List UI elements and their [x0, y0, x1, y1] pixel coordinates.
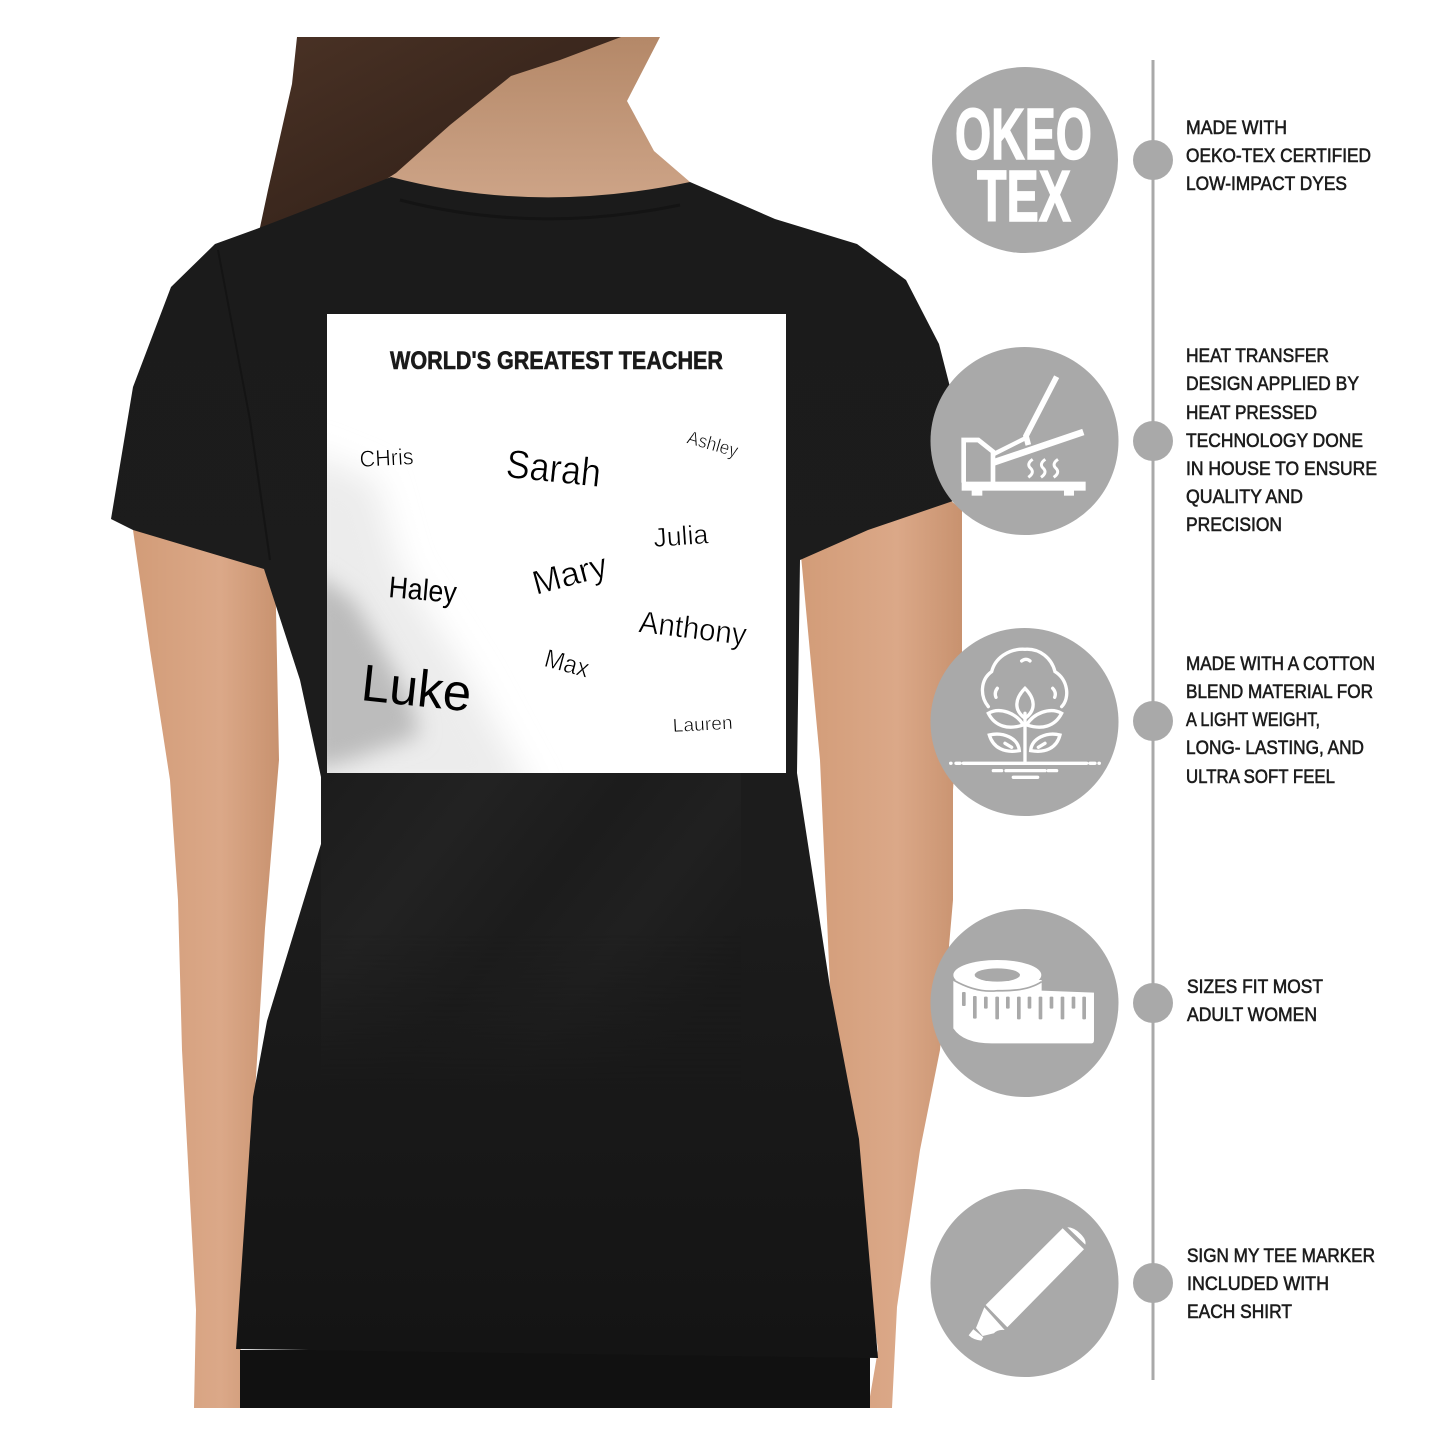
- right arm: [800, 500, 962, 1408]
- text: cotton blend: MADE WITH A COTTON: [1186, 653, 1375, 675]
- text: cotton blend: BLEND MATERIAL FOR: [1186, 681, 1373, 703]
- text: dyes: OEKO-TEX CERTIFIED: [1186, 145, 1371, 167]
- panel title: WORLD'S GREATEST TEACHER: [390, 347, 723, 375]
- text: heat transfer: HEAT PRESSED: [1186, 402, 1317, 424]
- printed panel with names: [327, 314, 786, 773]
- black t-shirt: [111, 177, 953, 1358]
- icon: measuring tape: [930, 909, 1118, 1097]
- text: heat transfer: PRECISION: [1186, 514, 1282, 536]
- text: sizes: [1187, 976, 1323, 1026]
- signature names: Sarah: [504, 442, 603, 496]
- signature names: Julia: [652, 519, 710, 553]
- text: heat transfer: QUALITY AND: [1186, 486, 1303, 508]
- text: dyes: [1186, 117, 1371, 195]
- text: heat transfer: TECHNOLOGY DONE: [1186, 430, 1363, 452]
- text: cotton blend: ULTRA SOFT FEEL: [1186, 766, 1335, 788]
- text: dyes: LOW-IMPACT DYES: [1186, 173, 1347, 195]
- text: dyes: MADE WITH: [1186, 117, 1287, 139]
- photo: woman wearing black t-shirt, back view: [111, 37, 962, 1408]
- icon: Okeo Tex badge: [932, 67, 1118, 253]
- neck: [380, 37, 690, 230]
- icon: heat press: [930, 347, 1118, 535]
- text: sizes: ADULT WOMEN: [1187, 1004, 1317, 1026]
- text: marker: SIGN MY TEE MARKER: [1187, 1245, 1375, 1267]
- signature names: Ashley: [685, 428, 741, 462]
- text: heat transfer: DESIGN APPLIED BY: [1186, 373, 1359, 395]
- signature names: Max: [541, 643, 593, 683]
- text: cotton blend: A LIGHT WEIGHT,: [1186, 709, 1320, 731]
- icon: Okeo Tex badge: OKEO: [955, 95, 1092, 175]
- leggings: [240, 1350, 870, 1408]
- left arm: [133, 530, 279, 1408]
- icon: Okeo Tex badge: TEX: [977, 157, 1071, 237]
- icon: cotton plant: [930, 628, 1118, 816]
- text: cotton blend: [1186, 653, 1375, 788]
- signature names: [359, 428, 749, 737]
- signature names: Haley: [387, 571, 458, 610]
- signature names: Luke: [359, 654, 474, 723]
- timeline line and dots: [1133, 60, 1173, 1380]
- hair: [259, 37, 621, 232]
- text: heat transfer: IN HOUSE TO ENSURE: [1186, 458, 1377, 480]
- signature names: Anthony: [637, 604, 749, 652]
- signature names: Lauren: [672, 713, 733, 737]
- signature names: CHris: [359, 443, 414, 472]
- text: sizes: SIZES FIT MOST: [1187, 976, 1323, 998]
- signature names: Mary: [528, 546, 611, 603]
- text: cotton blend: LONG- LASTING, AND: [1186, 737, 1364, 759]
- text: marker: INCLUDED WITH: [1187, 1273, 1329, 1295]
- icon: marker pen: [930, 1189, 1118, 1377]
- text: marker: EACH SHIRT: [1187, 1301, 1292, 1323]
- text: heat transfer: HEAT TRANSFER: [1186, 345, 1329, 367]
- text: marker: [1187, 1245, 1375, 1323]
- text: heat transfer: [1186, 345, 1377, 536]
